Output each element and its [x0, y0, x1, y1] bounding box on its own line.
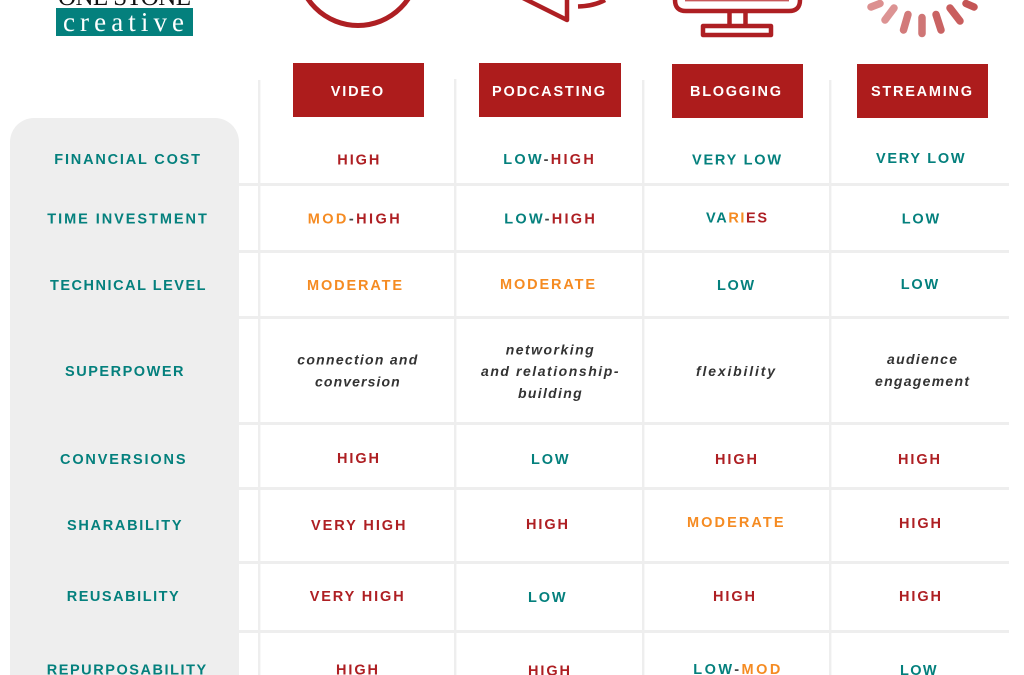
row: superpower — [297, 341, 970, 401]
row: financial cost: VERY LOW — [876, 151, 965, 167]
label: conversions: CONVERSIONS — [60, 452, 186, 468]
row: superpower: and relationship- — [481, 363, 619, 379]
row: reusability — [310, 589, 941, 606]
label: superpower: SUPERPOWER — [65, 364, 184, 380]
row: technical level: MODERATE — [500, 277, 595, 293]
row: time investment: LOW-HIGH — [504, 211, 595, 227]
row: reusability: HIGH — [899, 589, 941, 605]
label: time investment: TIME INVESTMENT — [47, 211, 207, 227]
row: time investment: LOW — [902, 211, 940, 227]
icon: video circle — [298, 0, 418, 26]
header: streaming — [857, 64, 988, 118]
header: video — [293, 63, 424, 117]
icon: podcast megaphone — [521, 0, 605, 20]
header: video: VIDEO — [331, 84, 383, 100]
row: conversions: HIGH — [715, 452, 757, 468]
header: blogging — [672, 64, 803, 118]
row: sharability — [311, 515, 941, 534]
label: reusability: REUSABILITY — [67, 589, 179, 605]
row: time investment — [308, 210, 940, 227]
row: repurposability — [336, 662, 937, 675]
header: podcasting: PODCASTING — [492, 84, 605, 100]
row: superpower: connection and — [297, 351, 418, 367]
row: technical level: LOW — [901, 277, 939, 293]
label: financial cost: FINANCIAL COST — [54, 152, 200, 168]
header: podcasting — [479, 63, 621, 117]
row: superpower: engagement — [875, 373, 970, 389]
logo: One Stone Creative: creative — [63, 7, 184, 37]
row: technical level: MODERATE — [307, 278, 402, 294]
row: superpower: conversion — [315, 373, 400, 389]
row: financial cost: VERY LOW — [692, 152, 781, 168]
row: sharability: HIGH — [899, 516, 941, 532]
icon: blog monitor — [675, 0, 800, 35]
row: reusability: LOW — [528, 590, 566, 606]
row: time investment: MOD-HIGH — [308, 211, 400, 227]
panel: criteria column — [10, 118, 239, 675]
row: financial cost: LOW-HIGH — [503, 152, 594, 168]
row: conversions — [337, 451, 940, 468]
row: technical level: LOW — [717, 278, 754, 294]
header: streaming: STREAMING — [871, 84, 972, 100]
row: reusability: HIGH — [713, 589, 755, 605]
row: sharability: HIGH — [526, 517, 568, 533]
row: reusability: VERY HIGH — [310, 589, 404, 605]
row: conversions: HIGH — [337, 451, 379, 467]
row: financial cost — [337, 151, 965, 168]
row: superpower: flexibility — [696, 363, 776, 379]
row: superpower: audience — [887, 351, 957, 367]
row: time investment: VARIES — [706, 210, 767, 226]
row: financial cost: HIGH — [337, 152, 379, 168]
row: superpower: building — [518, 385, 582, 401]
header: blogging: BLOGGING — [690, 84, 781, 100]
label: technical level: TECHNICAL LEVEL — [50, 278, 206, 294]
icon: streaming spinner — [871, 4, 974, 34]
row: technical level — [307, 277, 939, 294]
row: conversions: LOW — [531, 452, 569, 468]
label: sharability: SHARABILITY — [67, 518, 182, 534]
row: sharability: MODERATE — [687, 515, 784, 531]
row: sharability: VERY HIGH — [311, 518, 406, 534]
row: conversions: HIGH — [898, 452, 940, 468]
row: superpower: networking — [506, 341, 594, 357]
